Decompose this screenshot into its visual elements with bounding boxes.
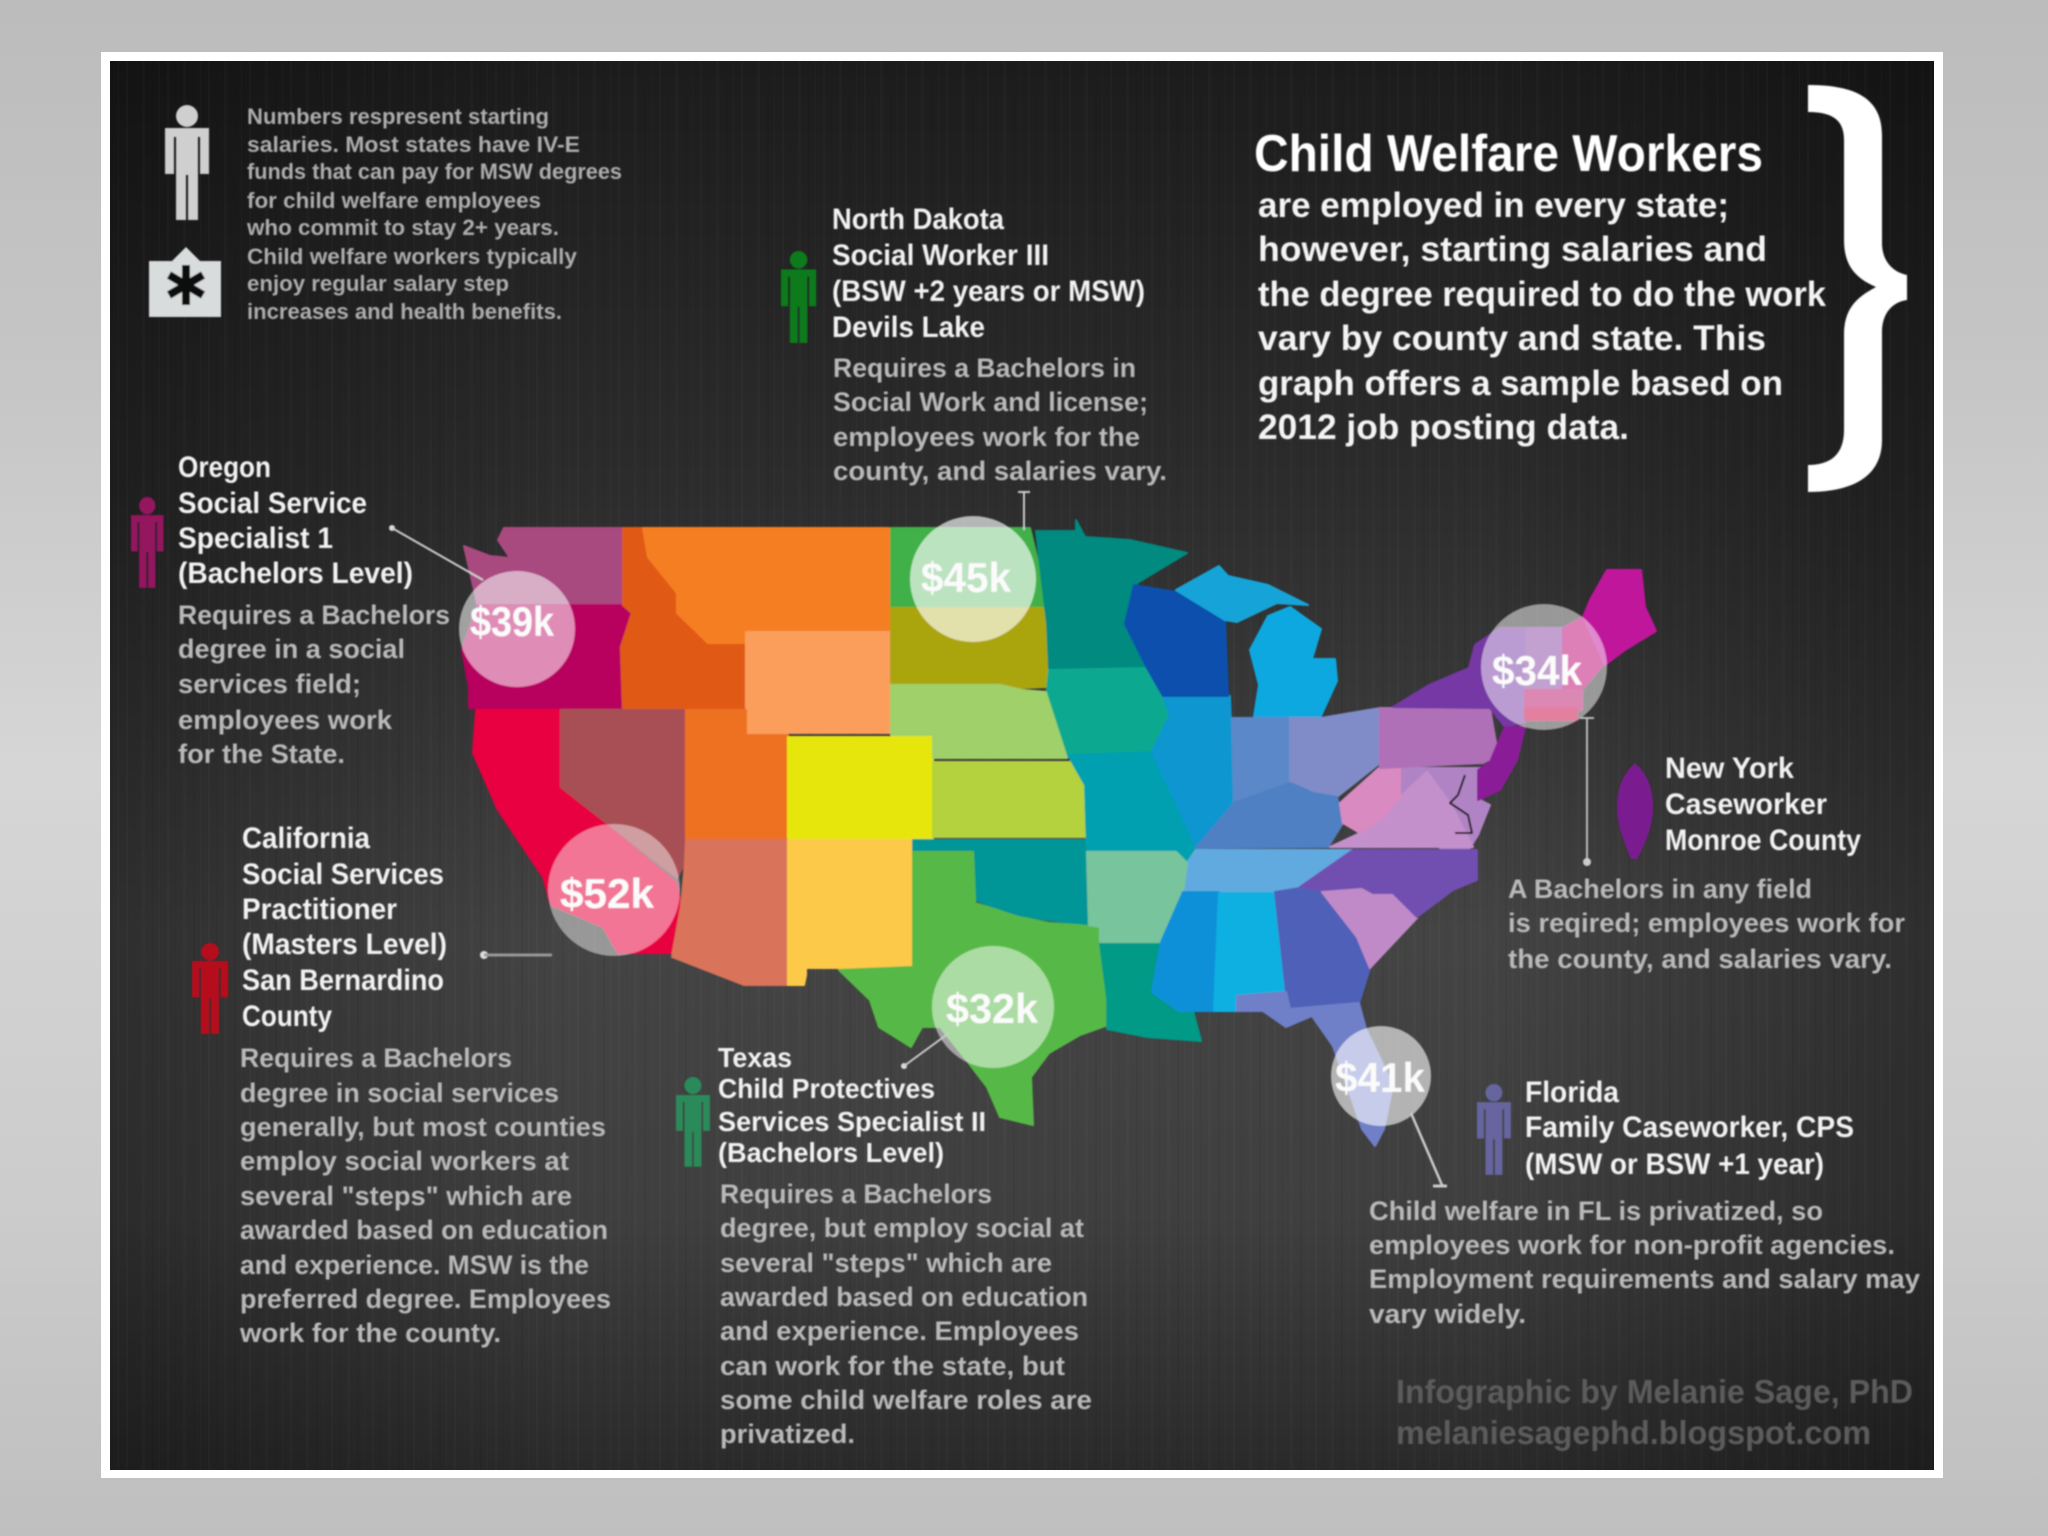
state: South Dakota — [891, 608, 1047, 688]
Texas heading and text: (Bachelors Level) — [718, 1137, 944, 1168]
intro paragraph: the degree required to do the work — [1258, 275, 1827, 314]
state: South Carolina — [1322, 887, 1417, 968]
California heading and text: degree in social services — [240, 1078, 559, 1108]
California heading and text: and experience. MSW is the — [240, 1250, 589, 1280]
North Dakota heading and text: county, and salaries vary. — [833, 456, 1167, 486]
icon: green person — [781, 251, 816, 343]
New York heading and text: Caseworker — [1665, 788, 1827, 821]
Texas heading and text: and experience. Employees — [720, 1316, 1079, 1346]
state: Indiana — [1232, 718, 1300, 803]
legend text: who commit to stay 2+ years. — [246, 215, 559, 240]
intro paragraph: are employed in every state; — [1258, 186, 1729, 225]
California heading and text: awarded based on education — [240, 1215, 608, 1245]
states: Vermont and western New Hampshire — [1525, 628, 1563, 690]
state: Texas — [839, 852, 1107, 1125]
callout: Florida — [1369, 1076, 1920, 1329]
state: New Jersey and Delaware — [1478, 727, 1525, 800]
Oregon heading and text: services field; — [178, 669, 361, 699]
intro paragraph: vary by county and state. This — [1258, 319, 1766, 358]
intro paragraph: graph offers a sample based on — [1258, 364, 1783, 403]
Texas heading and text: Texas — [718, 1042, 792, 1073]
North Dakota heading and text: employees work for the — [833, 422, 1140, 452]
state: Arizona — [672, 840, 788, 985]
state: Ohio — [1290, 708, 1380, 797]
state: New Mexico — [788, 840, 912, 985]
legend text: Child welfare workers typically — [247, 244, 578, 269]
California heading and text: County — [242, 1000, 332, 1033]
state: Maine — [1583, 570, 1656, 665]
state: North Dakota — [891, 528, 1045, 607]
state: Mississippi — [1152, 892, 1219, 1011]
state: Georgia — [1275, 888, 1370, 1009]
icon: health benefits asterisk badge — [149, 247, 221, 317]
state: Utah — [686, 710, 788, 838]
salary bubble: North Dakota $45k — [910, 516, 1036, 642]
Oregon heading and text: Requires a Bachelors — [178, 600, 450, 630]
state: Nevada — [561, 710, 685, 878]
callout: Texas — [676, 1042, 1092, 1449]
intro paragraph — [1258, 186, 1827, 447]
California heading and text: several "steps" which are — [240, 1181, 572, 1211]
California heading and text: preferred degree. Employees — [240, 1284, 611, 1314]
state: Upper Michigan — [1176, 566, 1308, 622]
North Dakota heading and text: Devils Lake — [832, 311, 985, 344]
New York heading and text: is reqired; employees work for — [1508, 908, 1905, 938]
California heading and text: Social Services — [242, 858, 444, 891]
state: Wisconsin — [1125, 585, 1228, 696]
New York heading and text: Monroe County — [1665, 824, 1861, 857]
state: Kansas — [933, 762, 1085, 837]
Florida heading and text: vary widely. — [1369, 1299, 1526, 1329]
salary bubble: Florida $41k: $41k — [1335, 1054, 1426, 1101]
state: Minnesota — [1036, 520, 1187, 670]
Oregon heading and text: Specialist 1 — [178, 522, 333, 555]
salary bubble: Florida $41k — [1331, 1026, 1431, 1126]
callout: California — [192, 822, 611, 1348]
state: West Virginia — [1340, 767, 1400, 833]
icon: teal person — [676, 1077, 710, 1167]
Oregon heading and text: Social Service — [178, 487, 367, 520]
credit line: Infographic by Melanie Sage, PhD — [1396, 1373, 1913, 1410]
title: Child Welfare Workers — [1254, 125, 1763, 183]
state: Arkansas — [1087, 852, 1187, 942]
state: New Hampshire — [1563, 617, 1607, 690]
state: Connecticut — [1525, 708, 1577, 720]
Oregon heading and text: Oregon — [178, 451, 271, 484]
legend text: increases and health benefits. — [247, 299, 562, 324]
state: North Carolina — [1300, 850, 1477, 917]
state: Nebraska — [891, 685, 1067, 758]
state: Maryland — [1400, 768, 1490, 848]
state: Lower Michigan — [1250, 607, 1337, 716]
North Dakota heading and text: Social Worker III — [832, 239, 1049, 272]
Texas heading and text: can work for the state, but — [720, 1351, 1065, 1381]
salary bubble: Texas $32k — [932, 946, 1054, 1068]
New York heading and text: New York — [1665, 752, 1794, 785]
legend text: for child welfare employees — [247, 188, 541, 213]
California heading and text: Requires a Bachelors — [240, 1043, 512, 1073]
leader line: North Dakota — [1018, 492, 1030, 530]
intro paragraph: however, starting salaries and — [1258, 230, 1767, 269]
Texas heading and text: Child Protectives — [718, 1073, 935, 1104]
state: Idaho — [621, 528, 744, 708]
legend text — [246, 104, 622, 324]
icon: person legend — [165, 105, 209, 220]
state: Louisiana — [1100, 944, 1201, 1041]
legend text: salaries. Most states have IV-E — [247, 132, 580, 157]
credit line — [1396, 1373, 1913, 1451]
state: Missouri — [1068, 752, 1196, 863]
state: Washington — [464, 528, 623, 607]
New York heading and text: the county, and salaries vary. — [1508, 944, 1892, 974]
state: Oklahoma — [913, 840, 1089, 925]
icon: magenta person — [131, 497, 164, 588]
callout: North Dakota — [781, 203, 1167, 486]
map of the United States — [462, 520, 1656, 1146]
Florida heading and text: Employment requirements and salary may — [1369, 1264, 1920, 1294]
Florida heading and text: Florida — [1525, 1076, 1619, 1109]
salary bubble: New York $34k: $34k — [1492, 647, 1583, 694]
North Dakota heading and text: North Dakota — [832, 203, 1004, 236]
decorative large brace — [1808, 85, 1907, 492]
California heading and text: California — [242, 822, 370, 855]
state: California — [473, 710, 681, 953]
state: Oregon — [462, 605, 632, 708]
New York heading and text — [1508, 752, 1905, 974]
California heading and text — [239, 822, 611, 1348]
icon: purple person blob — [1617, 763, 1653, 859]
leader line: Florida — [1411, 1113, 1447, 1186]
state: Colorado — [788, 737, 933, 838]
California heading and text: employ social workers at — [240, 1146, 569, 1176]
Texas heading and text: Services Specialist II — [718, 1106, 986, 1137]
state: Pennsylvania — [1380, 708, 1498, 768]
legend text: funds that can pay for MSW degrees — [247, 159, 622, 184]
North Dakota heading and text: (BSW +2 years or MSW) — [832, 275, 1145, 308]
Texas heading and text: degree, but employ social at — [720, 1213, 1084, 1243]
state: Wyoming — [746, 632, 890, 733]
North Dakota heading and text — [832, 203, 1167, 486]
icon: slate person — [1477, 1084, 1511, 1175]
Florida heading and text: (MSW or BSW +1 year) — [1525, 1148, 1824, 1181]
Oregon heading and text: (Bachelors Level) — [178, 557, 413, 590]
state: Massachusetts — [1525, 690, 1582, 710]
Texas heading and text: some child welfare roles are — [720, 1385, 1092, 1415]
state: Kentucky — [1196, 783, 1343, 848]
salary bubble: North Dakota $45k: $45k — [921, 554, 1012, 601]
North Dakota heading and text: Social Work and license; — [833, 387, 1148, 417]
state: Montana — [643, 528, 889, 643]
state: Alabama — [1214, 893, 1286, 1011]
Florida heading and text: employees work for non-profit agencies. — [1369, 1230, 1895, 1260]
credit line: melaniesagephd.blogspot.com — [1396, 1414, 1871, 1451]
Florida heading and text: Family Caseworker, CPS — [1525, 1111, 1854, 1144]
Oregon heading and text: for the State. — [178, 739, 345, 769]
Florida heading and text: Child welfare in FL is privatized, so — [1369, 1196, 1823, 1226]
California heading and text: generally, but most counties — [240, 1112, 606, 1142]
Texas heading and text — [718, 1042, 1092, 1449]
state: Florida — [1237, 992, 1393, 1146]
Texas heading and text: awarded based on education — [720, 1282, 1088, 1312]
callout: New York — [1508, 752, 1905, 974]
state: Illinois — [1152, 696, 1234, 848]
state: New York — [1393, 628, 1527, 727]
New York heading and text: A Bachelors in any field — [1508, 874, 1812, 904]
callout: Oregon — [131, 451, 450, 769]
California heading and text: (Masters Level) — [242, 928, 447, 961]
Texas heading and text: privatized. — [720, 1419, 855, 1449]
Oregon heading and text: degree in a social — [178, 634, 405, 664]
intro paragraph: 2012 job posting data. — [1258, 408, 1629, 447]
state: Virginia — [1330, 772, 1473, 847]
California heading and text: work for the county. — [239, 1318, 501, 1348]
icon: red person — [192, 943, 228, 1034]
salary bubble: New York $34k — [1481, 604, 1607, 730]
state: Iowa — [1047, 668, 1170, 755]
Chesapeake Bay — [1450, 775, 1472, 833]
salary bubble: California $52k — [548, 824, 680, 956]
salary bubble: Texas $32k: $32k — [946, 985, 1039, 1032]
California heading and text: Practitioner — [242, 893, 397, 926]
leader line: California — [480, 951, 552, 959]
California heading and text: San Bernardino — [242, 964, 444, 997]
salary bubble: California $52k: $52k — [560, 870, 655, 917]
Texas heading and text: Requires a Bachelors — [720, 1179, 992, 1209]
leader line: Texas — [901, 1033, 949, 1069]
Florida heading and text — [1369, 1076, 1920, 1329]
leader line: Oregon — [389, 525, 483, 580]
Texas heading and text: several "steps" which are — [720, 1248, 1052, 1278]
legend text: enjoy regular salary step — [247, 271, 509, 296]
salary bubble: Oregon $39k: $39k — [470, 598, 555, 645]
legend text: Numbers respresent starting — [247, 104, 549, 129]
leader line: New York — [1580, 718, 1594, 866]
Oregon heading and text: employees work — [178, 705, 393, 735]
North Dakota heading and text: Requires a Bachelors in — [833, 353, 1136, 383]
salary bubble: Oregon $39k — [459, 571, 575, 687]
state: Tennessee — [1183, 850, 1353, 892]
Oregon heading and text — [178, 451, 450, 769]
